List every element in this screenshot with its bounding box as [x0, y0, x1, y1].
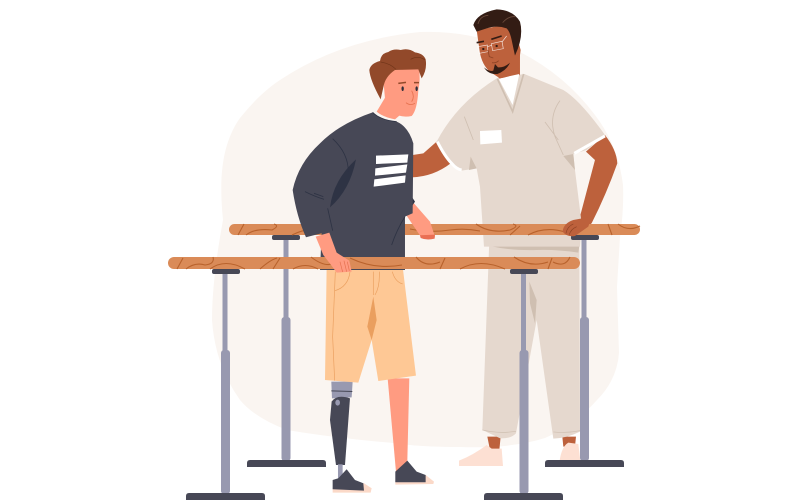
patient legs, prosthesis and shoes: [330, 378, 434, 493]
back bar posts: [247, 235, 624, 467]
therapist torso, arms and head: [412, 9, 617, 247]
patient shorts: [325, 267, 416, 383]
front left post: [186, 269, 265, 500]
front bar posts: [186, 269, 563, 500]
therapist legs and shoes: [459, 240, 580, 466]
background blob: [212, 32, 623, 447]
front right post: [484, 269, 563, 500]
patient figure: [293, 49, 435, 493]
back left post: [247, 235, 326, 467]
patient torso and head: [293, 49, 435, 270]
patient hand on front bar: [316, 233, 352, 273]
back right post: [545, 235, 624, 467]
therapist hand on back bar: [563, 217, 592, 236]
back wooden bar: [229, 224, 640, 235]
therapist figure: [412, 9, 617, 466]
front wooden bar: [168, 257, 580, 269]
